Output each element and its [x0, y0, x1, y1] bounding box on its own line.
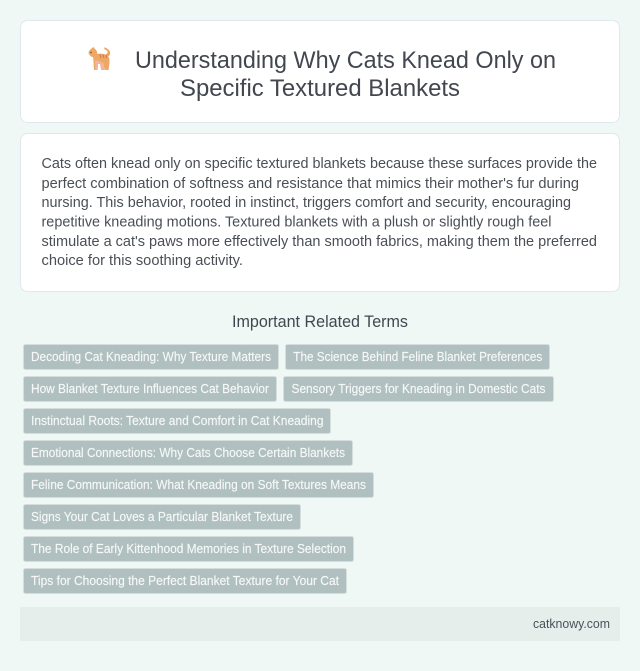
tag	[24, 344, 278, 370]
text block: description: stimulate a cat's paws more effectively than smooth fabrics, making them the preferred	[42, 234, 597, 250]
tag	[24, 504, 300, 530]
tag	[284, 376, 554, 402]
footer source: catknowy.com	[533, 616, 610, 631]
tag	[24, 376, 276, 402]
heading: related terms: Important Related Terms	[232, 313, 408, 331]
title: Specific Textured Blankets	[180, 75, 460, 102]
text block: description: Cats often knead only on specific textured blankets because these surfaces provide the	[42, 156, 597, 172]
text block: description: perfect combination of softness and resistance that mimics their mother's fur during	[42, 176, 579, 192]
tag: Signs Your Cat Loves a Particular Blanket Texture	[31, 510, 293, 524]
tag: The Science Behind Feline Blanket Preferences	[293, 350, 542, 364]
tag: Emotional Connections: Why Cats Choose Certain Blankets	[31, 446, 345, 460]
tag list	[24, 344, 554, 594]
text block: description	[42, 156, 597, 269]
tag: Feline Communication: What Kneading on Soft Textures Means	[31, 478, 366, 492]
tag: Instinctual Roots: Texture and Comfort in Cat Kneading	[31, 414, 324, 428]
tag: Decoding Cat Kneading: Why Texture Matters	[31, 350, 271, 364]
tag	[286, 344, 550, 370]
panel: description	[20, 134, 620, 292]
tag: The Role of Early Kittenhood Memories in Texture Selection	[31, 542, 346, 556]
panel: header	[20, 20, 620, 122]
title: Understanding Why Cats Knead Only on	[135, 47, 556, 74]
title	[135, 47, 556, 102]
footer	[20, 607, 620, 641]
tag: Tips for Choosing the Perfect Blanket Texture for Your Cat	[31, 574, 340, 588]
icon: cat	[88, 47, 110, 70]
text block: description: repetitive kneading motions. Textured blankets with a plush or slightly rough feel	[42, 214, 552, 230]
tag: How Blanket Texture Influences Cat Behavior	[31, 382, 269, 396]
tag	[24, 568, 346, 594]
tag	[24, 472, 374, 498]
tag	[24, 408, 330, 434]
tag	[24, 440, 352, 466]
tag	[24, 536, 354, 562]
text block: description: nursing. This behavior, rooted in instinct, triggers comfort and security, encouraging	[42, 195, 571, 211]
text block: description: choice for this soothing activity.	[42, 253, 243, 269]
tag: Sensory Triggers for Kneading in Domestic Cats	[292, 382, 546, 396]
